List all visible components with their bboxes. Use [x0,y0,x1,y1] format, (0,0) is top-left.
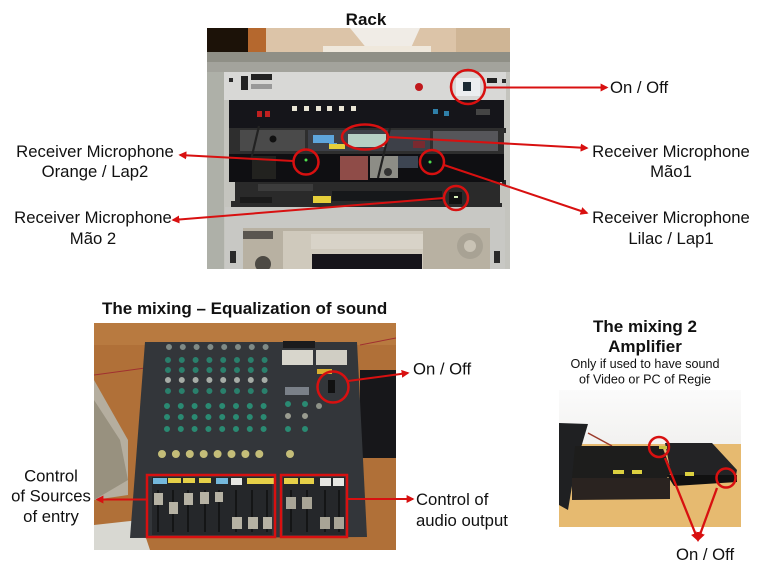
heading: mixing 2 amplifier: Amplifier [608,337,682,356]
callouts: rack circles [294,70,485,210]
label: On / Off mixer: On / Off [413,360,471,378]
label: Receiver Microphone Mão1: Receiver Microphone [592,142,750,161]
knobs: channel rows [162,347,336,454]
label: On / Off rack: On / Off [610,78,668,97]
heading: mixing 2 amplifier: The mixing 2 [593,317,697,336]
label: Control of Sources of entry: of entry [23,507,79,526]
title: Rack: Rack [346,10,387,29]
arrows: amplifier [665,458,717,540]
label: Control of Sources of entry: Control [24,466,78,486]
callouts: mixer highlights [147,372,348,537]
label: Control of audio output: audio output [416,511,508,530]
arrows: mixer [97,373,413,500]
photo: equipment rack [207,28,510,272]
label: Receiver Microphone Mão 2: Receiver Microphone [14,208,172,227]
label: Control of audio output: Control of [416,490,489,509]
photo: amplifier [559,390,741,527]
label: Control of Sources of entry: of Sources [11,486,91,506]
label: On / Off amplifier: On / Off [676,545,734,564]
callouts: amplifier circles [649,437,736,488]
label: Receiver Microphone Orange / Lap2: Orange / Lap2 [42,162,148,181]
heading: mixing equalization: The mixing – Equalization of sound [102,299,387,318]
note: amplifier usage: Only if used to have sound [570,357,720,371]
note: amplifier usage: of Video or PC of Regie [579,372,711,386]
label: Receiver Microphone Mão1: Mão1 [650,162,692,181]
label: Receiver Microphone Lilac / Lap1: Receiver Microphone [592,208,750,227]
photo: mixing desk [94,323,396,550]
label: Receiver Microphone Orange / Lap2: Receiver Microphone [16,142,174,161]
label: Receiver Microphone Mão 2: Mão 2 [70,229,116,248]
arrows: rack [173,88,607,220]
channel strips: output faders [283,477,345,535]
label: Receiver Microphone Lilac / Lap1: Lilac / Lap1 [628,229,714,248]
channel strips: input faders [152,477,274,535]
